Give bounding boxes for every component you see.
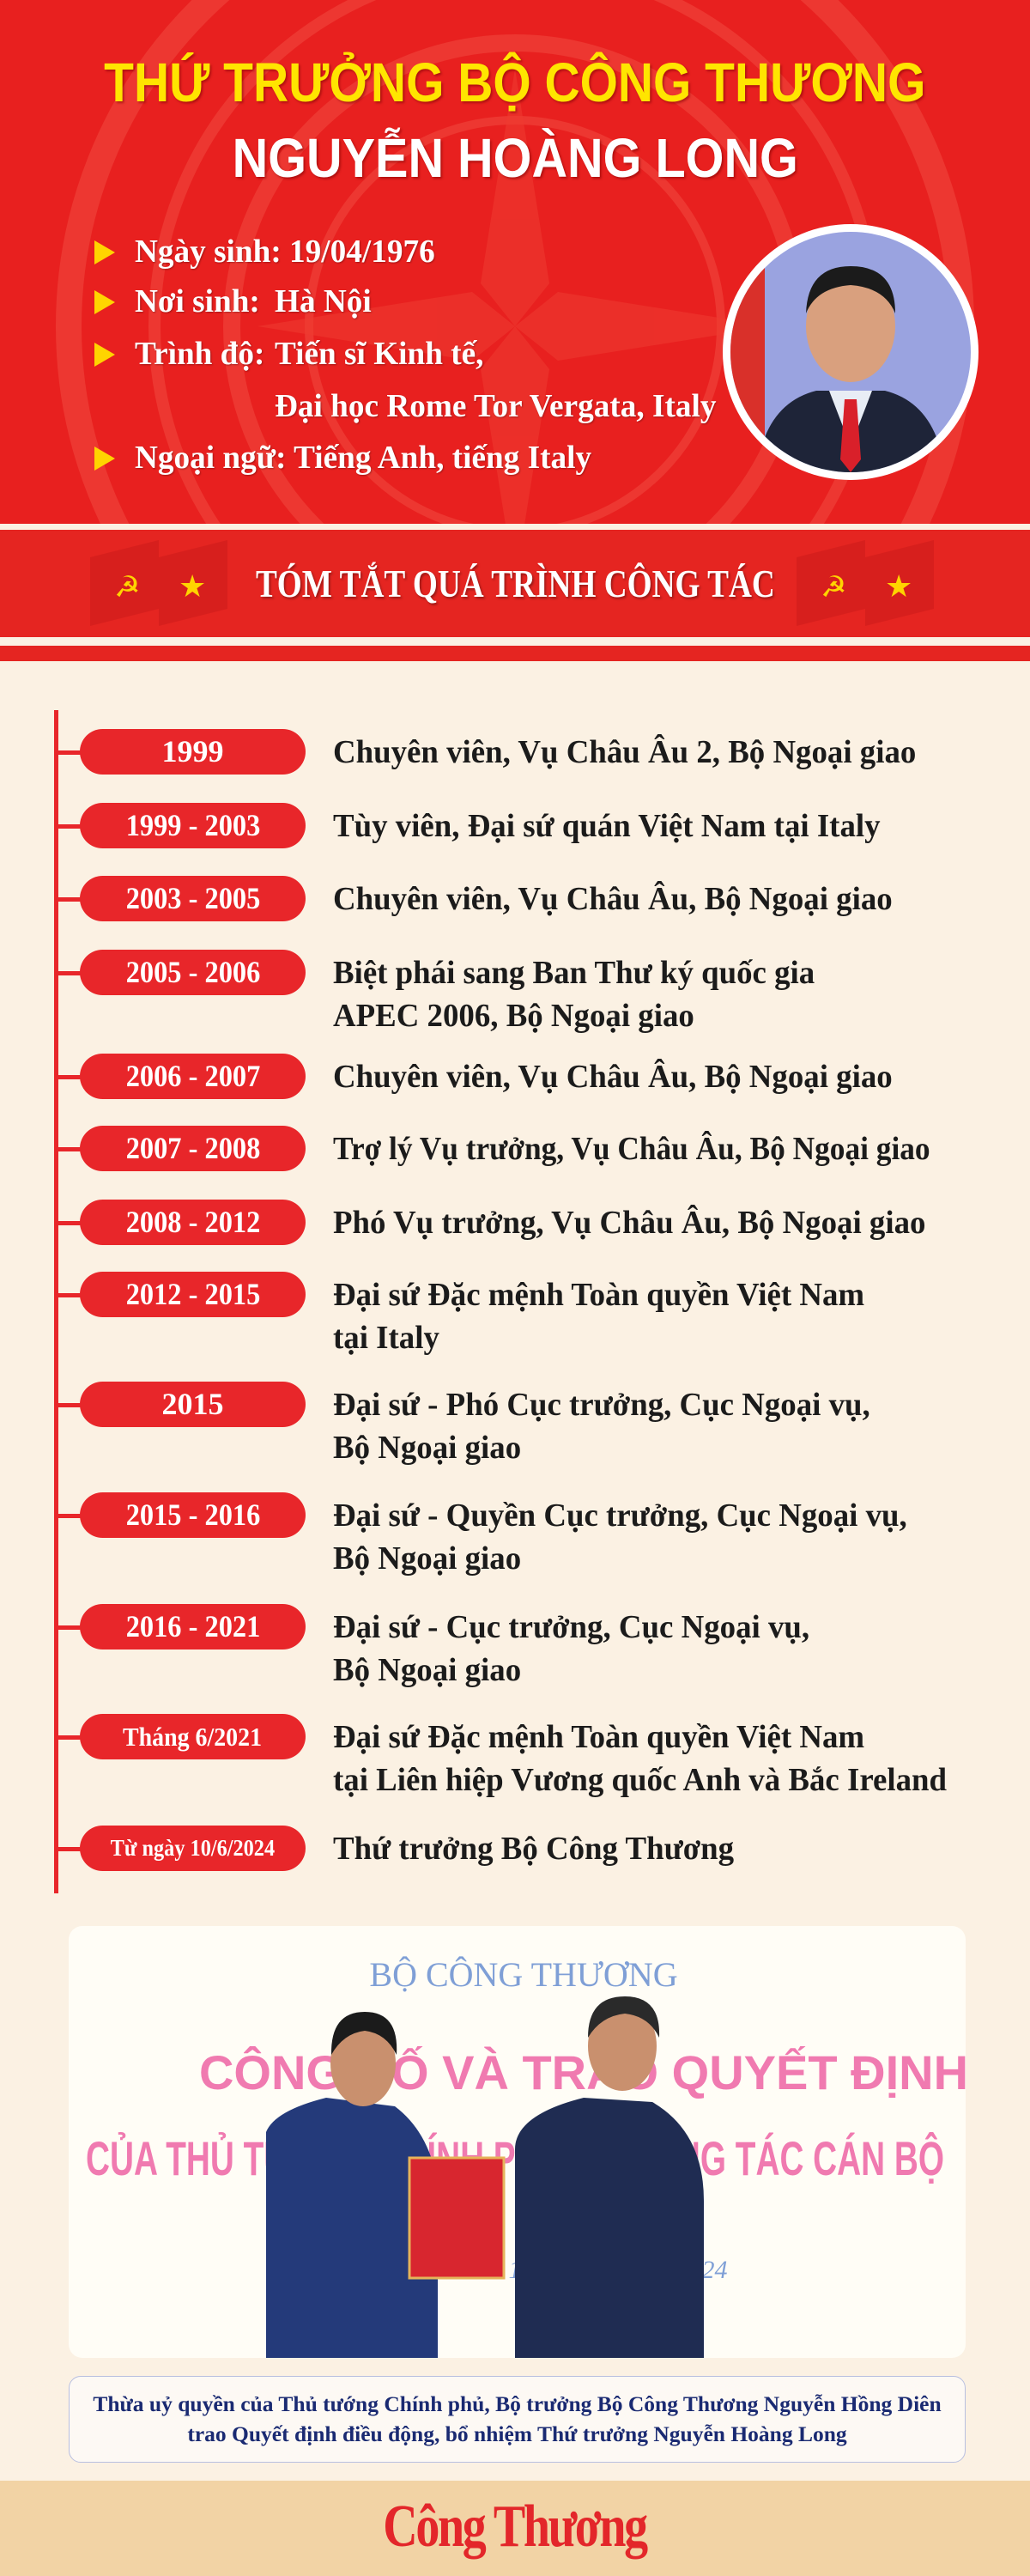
entry 2012-2015: 2012 - 2015 <box>125 1277 260 1311</box>
flag icons right: ★ <box>885 569 912 605</box>
entry 2015-2016: 2015 - 2016 <box>125 1498 260 1532</box>
entry 10/6/2024: Từ ngày 10/6/2024 <box>111 1835 275 1861</box>
flag icons right <box>797 540 934 626</box>
header panel: Nơi sinh: <box>135 283 260 319</box>
info: birth date <box>94 234 436 270</box>
entry 6/2021: Tháng 6/2021 <box>123 1722 263 1752</box>
entry 2016-2021 <box>80 1604 809 1688</box>
entry 2003-2005: 2003 - 2005 <box>125 881 260 915</box>
entry 2015 <box>80 1382 870 1466</box>
entry 2005-2006 <box>80 950 815 1034</box>
entry 2012-2015: Đại sứ Đặc mệnh Toàn quyền Việt Nam <box>333 1277 864 1313</box>
flag icons left: ★ <box>179 569 206 605</box>
info: birthplace <box>94 283 373 319</box>
entry 2008-2012 <box>80 1200 925 1245</box>
header panel: Ngày sinh: 19/04/1976 <box>135 234 435 270</box>
decorative drum pattern <box>56 0 974 524</box>
entry 6/2021: tại Liên hiệp Vương quốc Anh và Bắc Ireland <box>333 1762 947 1798</box>
entry 2015: 2015 <box>161 1387 223 1421</box>
flag icons left <box>90 540 227 626</box>
caption box: Thừa uỷ quyền của Thủ tướng Chính phủ, Bộ trưởng Bộ Công Thương Nguyễn Hồng Diên <box>93 2391 942 2416</box>
title line 1: THỨ TRƯỞNG BỘ CÔNG THƯƠNG <box>104 52 926 113</box>
entry 2005-2006: 2005 - 2006 <box>125 955 260 989</box>
entry 2016-2021: Bộ Ngoại giao <box>333 1652 521 1688</box>
entry 6/2021 <box>80 1714 947 1798</box>
header panel: Trình độ: <box>135 336 264 372</box>
header panel <box>0 0 1030 524</box>
photo: appointment ceremony: CÔNG BỐ VÀ TRAO QUYẾT ĐỊNH <box>199 2045 966 2099</box>
entry 10/6/2024: Thứ trưởng Bộ Công Thương <box>333 1831 734 1867</box>
flag icons left: ☭ <box>114 570 140 605</box>
entry 2007-2008: 2007 - 2008 <box>125 1131 260 1165</box>
flag icons right: ☭ <box>821 570 846 605</box>
entry 2016-2021: 2016 - 2021 <box>125 1609 260 1643</box>
entry 2006-2007 <box>80 1054 893 1099</box>
entry 2006-2007: Chuyên viên, Vụ Châu Âu, Bộ Ngoại giao <box>333 1059 893 1095</box>
entry 2006-2007: 2006 - 2007 <box>125 1059 260 1093</box>
header panel: Hà Nội <box>275 283 372 319</box>
header panel: Tiến sĩ Kinh tế, <box>275 336 483 372</box>
entry 1999 <box>80 729 916 775</box>
entry 2015: Đại sứ - Phó Cục trưởng, Cục Ngoại vụ, <box>333 1387 870 1423</box>
banner title: TÓM TẮT QUÁ TRÌNH CÔNG TÁC <box>256 562 774 605</box>
info: languages <box>94 440 592 477</box>
photo: appointment ceremony: 10 tháng 6 năm 2024 <box>508 2256 728 2284</box>
header panel: Ngoại ngữ: Tiếng Anh, tiếng Italy <box>135 440 591 476</box>
caption box <box>69 2376 966 2463</box>
entry 6/2021: Đại sứ Đặc mệnh Toàn quyền Việt Nam <box>333 1719 864 1755</box>
entry 1999: Chuyên viên, Vụ Châu Âu 2, Bộ Ngoại giao <box>333 734 916 770</box>
caption box: trao Quyết định điều động, bổ nhiệm Thứ trưởng Nguyễn Hoàng Long <box>187 2421 847 2446</box>
entry 2008-2012: Phó Vụ trưởng, Vụ Châu Âu, Bộ Ngoại giao <box>333 1205 925 1241</box>
info: education <box>94 336 718 425</box>
entry 2015: Bộ Ngoại giao <box>333 1430 521 1466</box>
entry 2005-2006: Biệt phái sang Ban Thư ký quốc gia <box>333 955 815 991</box>
title line 2: NGUYỄN HOÀNG LONG <box>232 127 798 189</box>
entry 1999-2003: Tùy viên, Đại sứ quán Việt Nam tại Italy <box>333 808 881 844</box>
banner: work history heading <box>0 530 1030 637</box>
timeline <box>54 710 58 1893</box>
entry 2007-2008 <box>80 1126 930 1171</box>
logo: Công Thương: Công Thương <box>384 2494 646 2560</box>
entry 2008-2012: 2008 - 2012 <box>125 1205 260 1239</box>
entry 1999-2003 <box>80 803 881 848</box>
entry 2015-2016 <box>80 1492 907 1577</box>
entry 10/6/2024 <box>80 1826 734 1871</box>
entry 2005-2006: APEC 2006, Bộ Ngoại giao <box>333 998 694 1034</box>
entry 1999-2003: 1999 - 2003 <box>125 808 260 842</box>
portrait photo <box>723 224 978 480</box>
header panel: Đại học Rome Tor Vergata, Italy <box>275 388 716 424</box>
entry 1999: 1999 <box>161 734 223 769</box>
photo: appointment ceremony <box>69 1926 966 2358</box>
footer <box>0 2481 1030 2576</box>
photo: appointment ceremony: BỘ CÔNG THƯƠNG <box>369 1955 678 1994</box>
entry 2016-2021: Đại sứ - Cục trưởng, Cục Ngoại vụ, <box>333 1609 809 1645</box>
entry 2015-2016: Bộ Ngoại giao <box>333 1540 521 1577</box>
entry 2007-2008: Trợ lý Vụ trưởng, Vụ Châu Âu, Bộ Ngoại giao <box>333 1131 930 1167</box>
entry 2012-2015: tại Italy <box>333 1320 439 1356</box>
entry 2003-2005: Chuyên viên, Vụ Châu Âu, Bộ Ngoại giao <box>333 881 893 917</box>
entry 2012-2015 <box>80 1272 864 1356</box>
entry 2003-2005 <box>80 876 893 921</box>
entry 2015-2016: Đại sứ - Quyền Cục trưởng, Cục Ngoại vụ, <box>333 1498 907 1534</box>
